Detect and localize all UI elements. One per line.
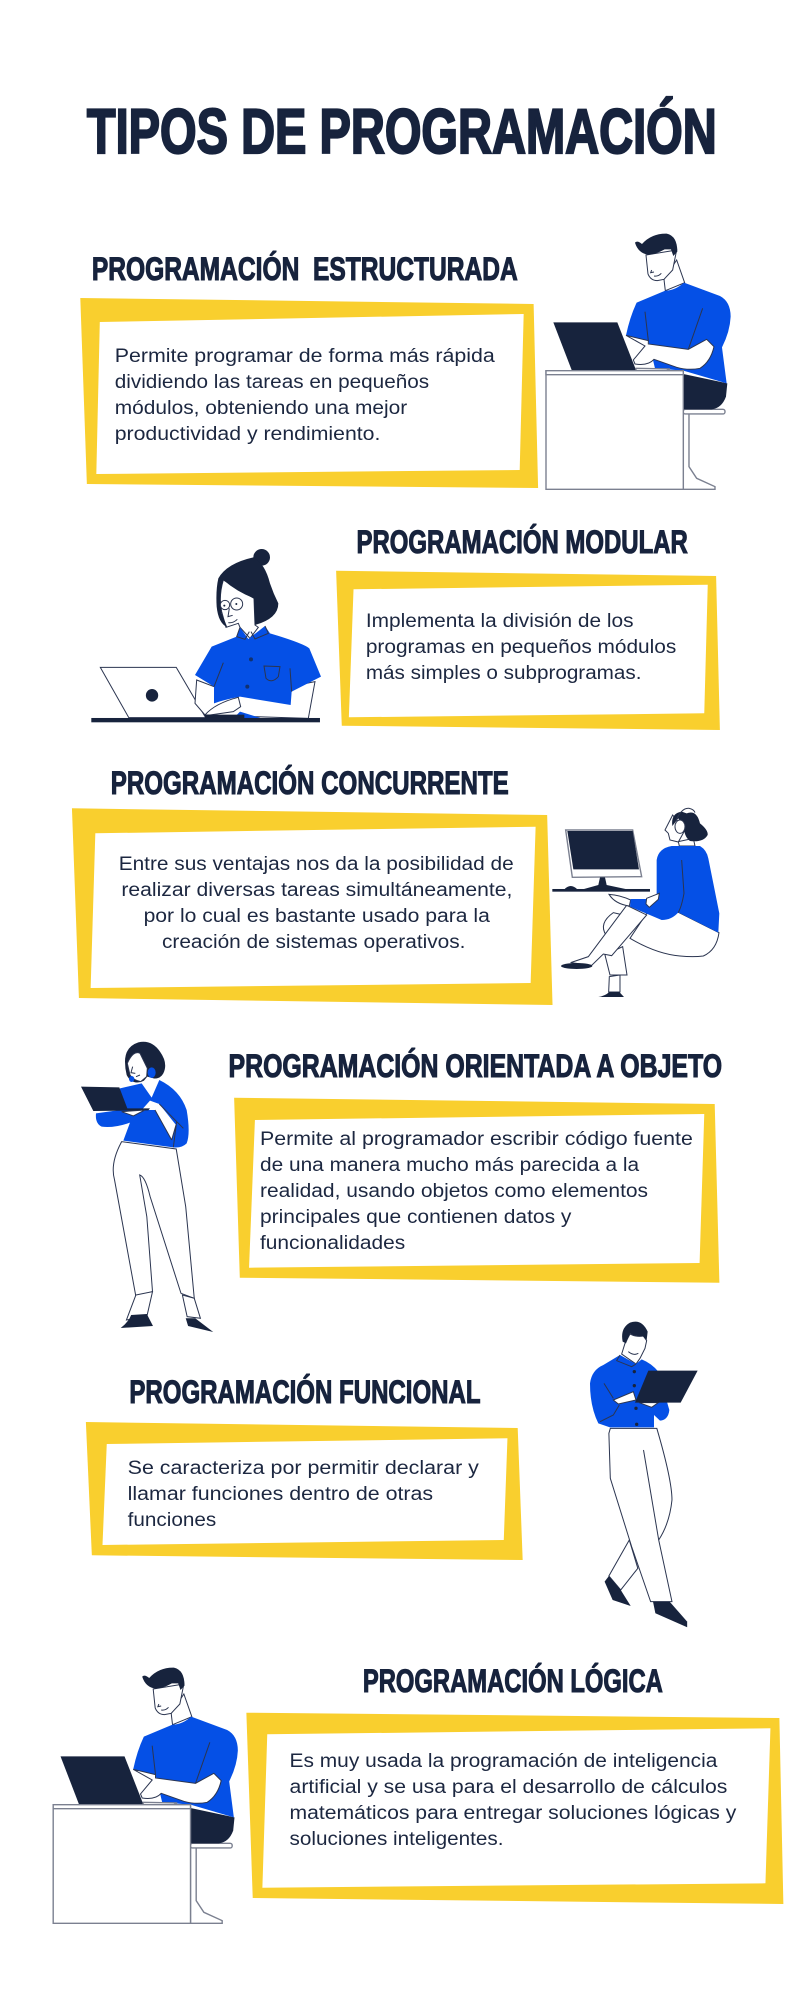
text block: concurrente: Entre sus ventajas nos da la posibilidad de	[119, 853, 514, 875]
icon: woman with headset at monitor	[552, 808, 719, 997]
text block: lógica: artificial y se usa para el desarrollo de cálculos	[290, 1776, 728, 1798]
text block: orientada a objeto: de una manera mucho más parecida a la	[260, 1154, 639, 1176]
text block: estructurada: productividad y rendimiento.	[115, 423, 380, 445]
text block: funcional: llamar funciones dentro de otras	[128, 1483, 433, 1505]
text block: lógica: soluciones inteligentes.	[290, 1828, 503, 1850]
icon: man typing at desk, bottom	[53, 1668, 238, 1923]
panel: programación estructurada	[80, 298, 538, 488]
text block: modular: Implementa la división de los	[366, 610, 634, 632]
heading: programación estructurada: PROGRAMACIÓN ESTRUCTURADA	[92, 251, 518, 287]
text block: modular: más simples o subprogramas.	[366, 662, 641, 684]
heading: programación funcional: PROGRAMACIÓN FUNCIONAL	[129, 1374, 481, 1410]
text block: estructurada: dividiendo las tareas en pequeños	[115, 371, 429, 393]
text block: estructurada	[115, 345, 495, 445]
text block: estructurada: módulos, obteniendo una mejor	[115, 397, 408, 419]
text block: concurrente: por lo cual es bastante usado para la	[144, 905, 490, 927]
panel: programación lógica	[246, 1713, 783, 1904]
text block: lógica: matemáticos para entregar soluciones lógicas y	[290, 1802, 737, 1824]
text block: orientada a objeto	[260, 1128, 693, 1254]
text block: lógica	[290, 1750, 737, 1850]
heading: programación modular: PROGRAMACIÓN MODULAR	[357, 524, 688, 560]
text block: estructurada: Permite programar de forma más rápida	[115, 345, 495, 367]
text block: modular	[366, 610, 677, 684]
panel: programación modular	[336, 571, 720, 730]
text block: funcional	[128, 1457, 479, 1531]
heading: programación lógica: PROGRAMACIÓN LÓGICA	[363, 1663, 663, 1699]
text block: orientada a objeto: funcionalidades	[260, 1232, 406, 1254]
icon: standing man with laptop	[590, 1322, 698, 1627]
text block: funcional: funciones	[128, 1509, 217, 1531]
heading: programación concurrente: PROGRAMACIÓN CONCURRENTE	[111, 765, 509, 801]
text block: concurrente	[119, 853, 514, 953]
icon: woman with bun and laptop	[91, 549, 321, 722]
panel: programación funcional	[86, 1422, 523, 1560]
text block: concurrente: realizar diversas tareas simultáneamente,	[121, 879, 512, 901]
text block: concurrente: creación de sistemas operativos.	[162, 931, 465, 953]
text block: orientada a objeto: Permite al programador escribir código fuente	[260, 1128, 693, 1150]
panel: programación orientada a objeto	[234, 1098, 719, 1283]
text block: orientada a objeto: principales que contienen datos y	[260, 1206, 572, 1228]
icon: standing woman with laptop	[81, 1042, 213, 1332]
text block: modular: programas en pequeños módulos	[366, 636, 677, 658]
icon: man typing at desk	[546, 234, 731, 489]
text block: orientada a objeto: realidad, usando objetos como elementos	[260, 1180, 648, 1202]
text block: funcional: Se caracteriza por permitir declarar y	[128, 1457, 479, 1479]
text block: lógica: Es muy usada la programación de inteligencia	[290, 1750, 718, 1772]
panel: programación concurrente	[72, 808, 553, 1005]
